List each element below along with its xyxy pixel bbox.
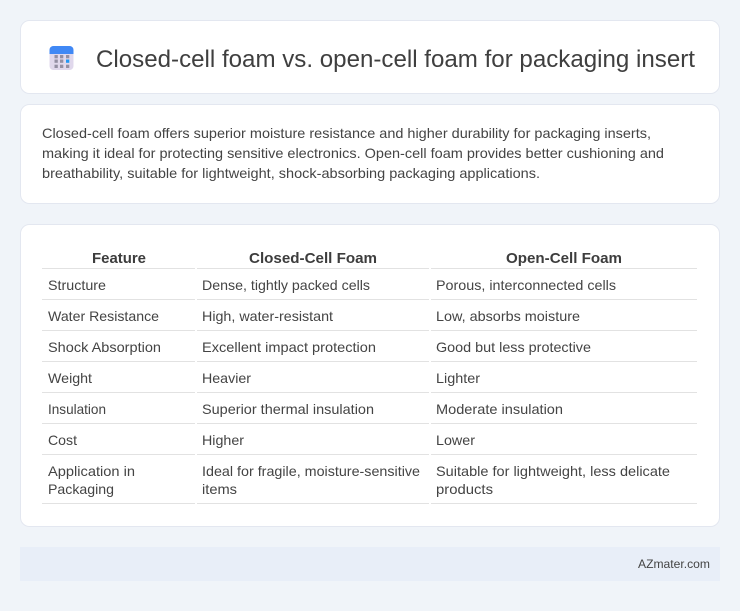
table header: [92, 250, 622, 267]
summary text: making it ideal for protecting sensitive electronics. Open-cell foam provides better cushioning and: [42, 145, 664, 161]
row: application in packaging: Suitable for lightweight, less delicate: [436, 463, 670, 479]
row: structure: Porous, interconnected cells: [436, 277, 616, 293]
row: insulation: [48, 401, 563, 417]
row: weight: Lighter: [436, 370, 480, 386]
row: cost: Higher: [202, 432, 244, 448]
row: insulation: Moderate insulation: [436, 401, 563, 417]
row: cost: Lower: [436, 432, 475, 448]
row: application in packaging: Application in: [48, 463, 135, 479]
row: cost: [48, 432, 475, 448]
table header: Feature: [92, 250, 146, 267]
footer credit: AZmater.com: [638, 557, 710, 571]
summary text: [42, 125, 664, 181]
row: application in packaging: Ideal for fragile, moisture-sensitive: [202, 463, 420, 479]
icon: calendar: [50, 46, 74, 70]
row: insulation: Insulation: [48, 401, 106, 417]
table header: Open-Cell Foam: [506, 250, 622, 267]
row: weight: Heavier: [202, 370, 251, 386]
panel: title card: [20, 20, 720, 94]
row: water resistance: High, water-resistant: [202, 308, 333, 324]
row: weight: [48, 370, 480, 386]
row: insulation: Superior thermal insulation: [202, 401, 374, 417]
row: application in packaging: products: [436, 481, 493, 497]
row: cost: Cost: [48, 432, 77, 448]
row: application in packaging: Packaging: [48, 481, 114, 497]
title: Closed-cell foam vs. open-cell foam for packaging insert: [96, 46, 695, 73]
panel: summary: [20, 104, 720, 204]
panel: comparison table: [20, 224, 720, 526]
row: water resistance: Water Resistance: [48, 308, 159, 324]
summary text: Closed-cell foam offers superior moisture resistance and higher durability for packaging inserts,: [42, 125, 651, 141]
row: structure: Structure: [48, 277, 106, 293]
row: shock absorption: [48, 339, 591, 355]
row: water resistance: [48, 308, 580, 324]
row: structure: [48, 277, 616, 293]
summary text: breathability, suitable for lightweight, shock-absorbing packaging applications.: [42, 165, 540, 181]
row: shock absorption: Shock Absorption: [48, 339, 161, 355]
row: shock absorption: Excellent impact protection: [202, 339, 376, 355]
row: water resistance: Low, absorbs moisture: [436, 308, 580, 324]
row: weight: Weight: [48, 370, 92, 386]
row: structure: Dense, tightly packed cells: [202, 277, 370, 293]
row: application in packaging: [48, 463, 670, 497]
table header: Closed-Cell Foam: [249, 250, 377, 267]
footer: [20, 547, 720, 581]
row: application in packaging: items: [202, 481, 237, 497]
row: shock absorption: Good but less protective: [436, 339, 591, 355]
table rules: [42, 268, 697, 504]
